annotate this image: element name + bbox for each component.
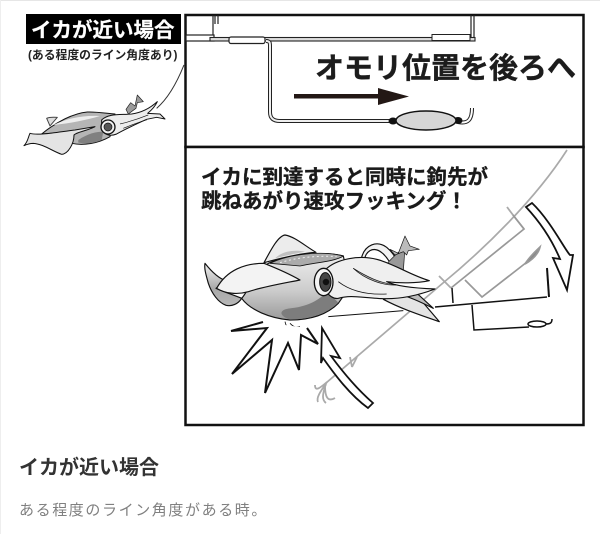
arrow: downward swing <box>526 203 573 290</box>
panel: top rig frame <box>186 15 584 147</box>
rig: branch bar and sinker <box>186 15 475 130</box>
ghost rig before strike <box>451 215 540 297</box>
gray hook marks on line <box>315 207 524 403</box>
heading: move sinker back: オモリ位置を後ろへ <box>315 52 576 85</box>
main text: 跳ねあがり速攻フッキング！ <box>201 189 467 213</box>
title badge: イカが近い場合 <box>31 18 175 42</box>
caption heading: イカが近い場合 <box>19 455 159 479</box>
impact burst <box>231 322 318 393</box>
main text: イカに到達すると同時に鉤先が <box>201 165 488 189</box>
icon: small squid on line <box>24 65 184 154</box>
fishing line <box>326 150 567 383</box>
caption body: ある程度のライン角度がある時。 <box>19 502 268 519</box>
icon: large squid <box>205 235 439 331</box>
arrow: rightward <box>294 88 409 105</box>
rig after strike <box>435 268 552 330</box>
main text <box>201 165 488 213</box>
panel: action frame <box>186 147 584 425</box>
subtitle: (ある程度のライン角度あり) <box>28 48 177 62</box>
arrow: upward strike <box>321 328 373 408</box>
